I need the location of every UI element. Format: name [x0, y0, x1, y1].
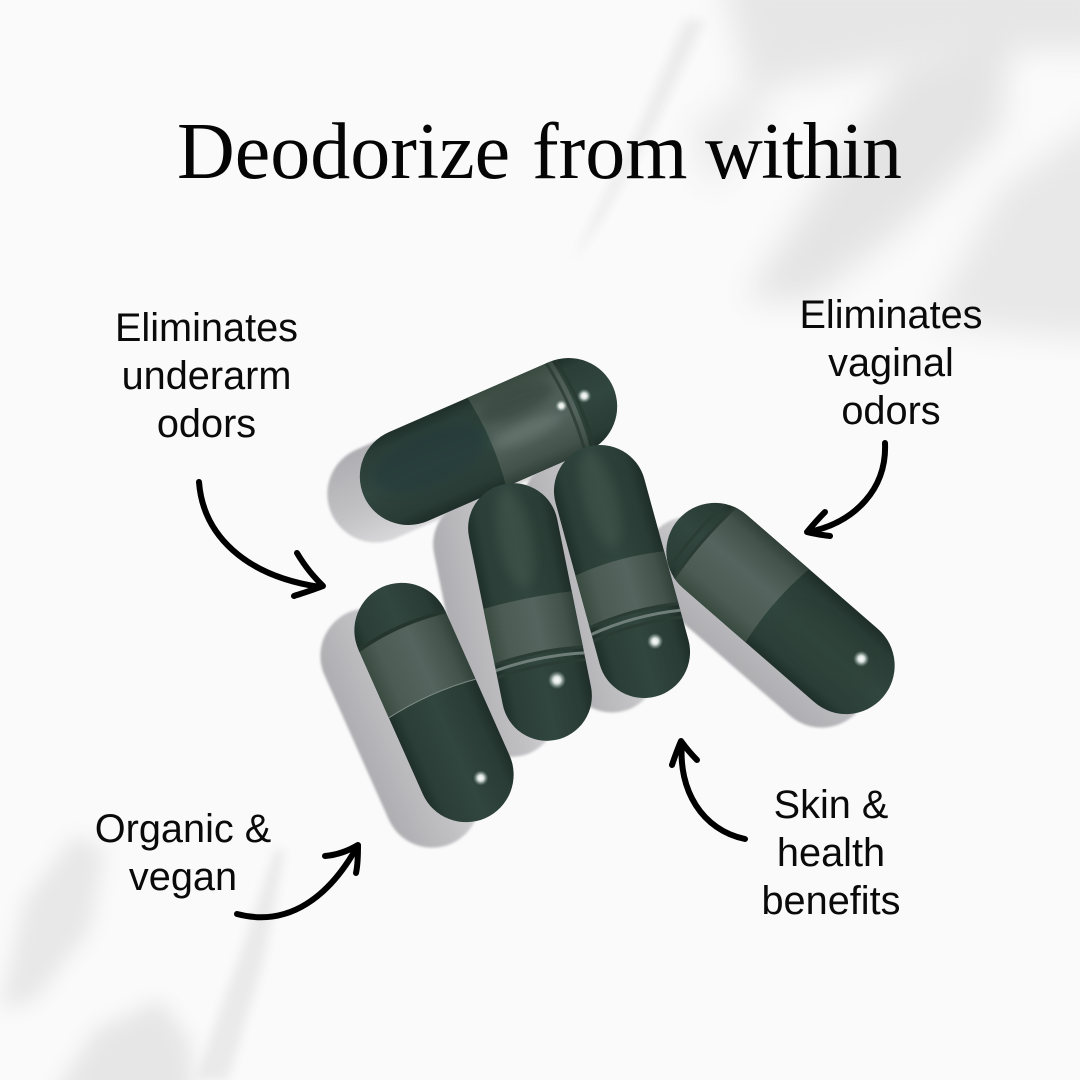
capsule: far right	[666, 502, 895, 714]
label: skin and health	[761, 783, 901, 923]
foliage shadow: bottom left	[0, 835, 285, 1080]
arrow: organic	[237, 845, 358, 917]
arrow: skin	[672, 741, 745, 839]
title: within	[705, 108, 902, 196]
label: skin and health: Skin &	[774, 783, 888, 827]
label: underarm odors: underarm	[122, 354, 291, 398]
label: vaginal odors: odors	[841, 389, 941, 433]
capsule: bottom left	[354, 582, 514, 822]
arrow: underarm	[199, 482, 323, 596]
arrow: vaginal	[807, 443, 885, 536]
label: vaginal odors: vaginal	[828, 341, 954, 385]
label: skin and health: benefits	[761, 879, 901, 923]
label: underarm odors: Eliminates	[115, 306, 298, 350]
label: organic and vegan: Organic &	[95, 807, 271, 851]
label: underarm odors	[115, 306, 298, 446]
label: vaginal odors	[799, 293, 983, 433]
label: underarm odors: odors	[157, 402, 256, 446]
label: skin and health: health	[777, 831, 885, 875]
capsule: top	[360, 358, 618, 525]
capsule shadows	[305, 360, 890, 863]
capsule: left centre	[468, 483, 592, 741]
label: organic and vegan: vegan	[129, 855, 237, 899]
foliage shadow: top right	[572, 0, 1080, 340]
capsule: right centre	[554, 445, 690, 698]
label: vaginal odors: Eliminates	[799, 293, 983, 337]
label: organic and vegan	[95, 807, 271, 899]
title: Deodorize	[177, 108, 510, 196]
title: from	[532, 108, 688, 196]
